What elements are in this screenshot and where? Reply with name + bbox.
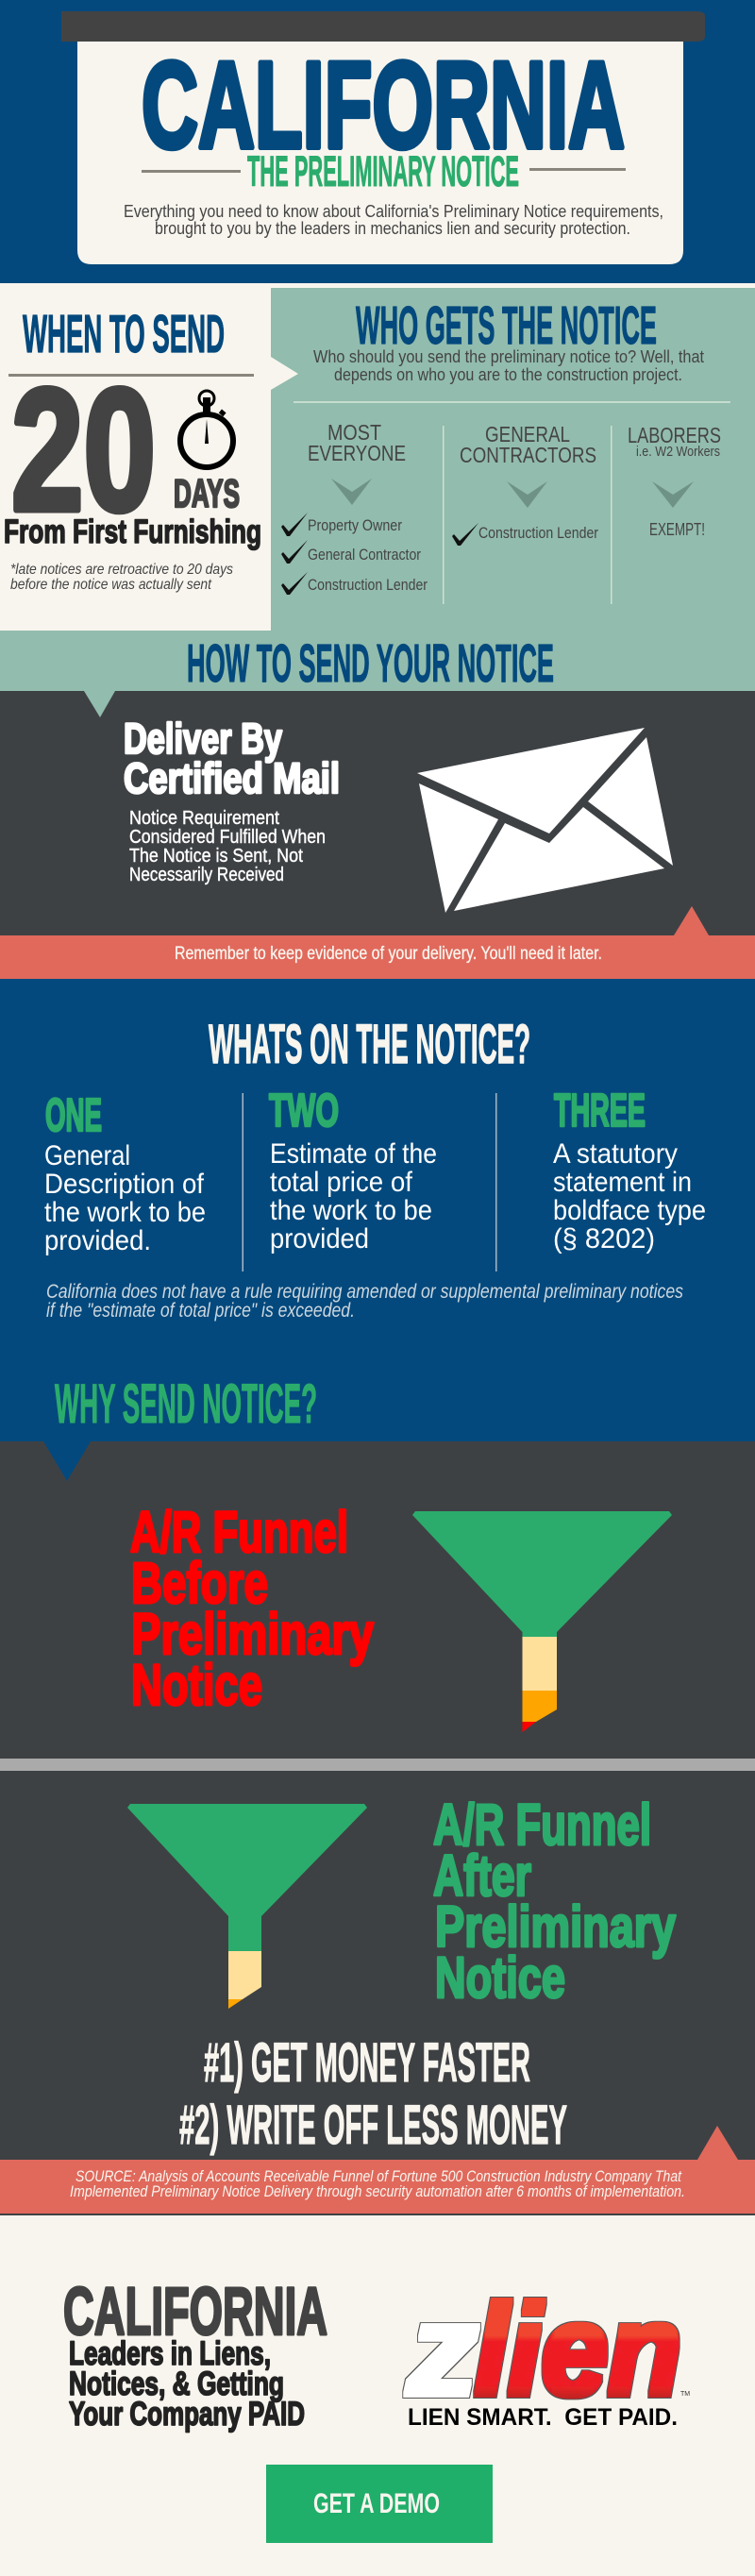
column: one: the work to be xyxy=(44,1197,206,1228)
panel: whats on the notice: WHY SEND NOTICE? xyxy=(55,1373,317,1435)
column: two xyxy=(269,1086,437,1254)
column: three: statement in xyxy=(553,1167,692,1198)
who gets intro text xyxy=(313,347,704,384)
delivery text: Notice Requirement xyxy=(129,808,279,829)
panel: who gets the notice xyxy=(0,288,755,691)
column: general contractors xyxy=(452,422,598,546)
column: most everyone: EVERYONE xyxy=(308,441,406,465)
footer tagline xyxy=(69,2335,305,2433)
column: one: provided. xyxy=(44,1225,151,1256)
delivery text xyxy=(129,808,326,885)
button: get a demo xyxy=(266,2465,493,2543)
column: two: total price of xyxy=(270,1167,413,1198)
logo: zlien: LIEN SMART. GET PAID. xyxy=(408,2404,678,2431)
column: general contractors: CONTRACTORS xyxy=(460,443,596,467)
label: funnel after: After xyxy=(433,1844,531,1908)
intro text: brought to you by the leaders in mechanics lien and security protection. xyxy=(155,219,630,238)
label: funnel before: Notice xyxy=(131,1653,262,1717)
column: two: TWO xyxy=(269,1086,339,1136)
banner: source xyxy=(0,2126,755,2215)
column: three: A statutory xyxy=(553,1138,678,1170)
column: most everyone xyxy=(281,420,428,595)
column: laborers xyxy=(628,423,721,539)
column: laborers: LABORERS xyxy=(628,423,721,447)
banner: keep evidence xyxy=(0,906,755,979)
column: one: Description of xyxy=(44,1169,205,1200)
column: two: Estimate of the xyxy=(270,1138,437,1170)
panel: header xyxy=(0,0,755,283)
label: days: DAYS xyxy=(174,471,240,515)
banner: keep evidence: Remember to keep evidence of your delivery. You'll need it later. xyxy=(175,944,602,964)
button: get a demo: GET A DEMO xyxy=(313,2488,440,2519)
note: estimate of total price: if the "estimate of total price" is exceeded. xyxy=(46,1300,355,1322)
footnote: late notices: *late notices are retroactive to 20 days xyxy=(10,562,233,578)
panel: when to send xyxy=(0,288,298,631)
column: one: ONE xyxy=(45,1090,102,1141)
icon: stopwatch xyxy=(180,391,233,467)
label: funnel after: Preliminary xyxy=(435,1894,676,1959)
check marks xyxy=(281,513,308,595)
chevron xyxy=(507,481,547,508)
column: one: General xyxy=(44,1140,130,1171)
icon: envelope xyxy=(417,728,673,913)
intro text: Everything you need to know about California's Preliminary Notice requirements, xyxy=(124,202,663,221)
chart: funnel after xyxy=(127,1804,367,2009)
heading: deliver by certified mail xyxy=(124,715,340,802)
panel: why send notice xyxy=(0,1441,755,2160)
column: three: THREE xyxy=(554,1086,646,1136)
footnote: late notices: before the notice was actually sent xyxy=(10,577,211,593)
pointer xyxy=(43,1441,91,1481)
footer tagline: Notices, & Getting xyxy=(69,2366,284,2402)
footer tagline: Your Company PAID xyxy=(69,2396,305,2433)
chevron xyxy=(652,481,694,508)
label: funnel before xyxy=(130,1500,374,1717)
column: two: provided xyxy=(270,1223,369,1254)
column: three: boldface type xyxy=(553,1195,706,1226)
column: most everyone: General Contractor xyxy=(308,546,421,564)
column: most everyone: Construction Lender xyxy=(308,576,428,594)
panel: footer xyxy=(63,2275,690,2543)
number: 20: 20 xyxy=(11,352,156,547)
column: most everyone: MOST xyxy=(327,420,381,445)
column: general contractors: Construction Lender xyxy=(478,524,598,542)
pointer xyxy=(84,691,115,717)
delivery text: Considered Fulfilled When xyxy=(129,827,326,848)
chart: funnel before xyxy=(412,1511,672,1732)
label: funnel after xyxy=(433,1793,676,2010)
footnote: late notices xyxy=(10,562,233,593)
column: three: (§ 8202) xyxy=(553,1223,655,1254)
panel: whats on the notice xyxy=(0,979,755,1441)
heading: deliver by certified mail: Deliver By xyxy=(124,715,282,763)
column: laborers: i.e. W2 Workers xyxy=(636,444,720,460)
heading: deliver by certified mail: Certified Mail xyxy=(124,754,340,802)
label: funnel before: Before xyxy=(131,1551,268,1615)
column: one xyxy=(44,1090,206,1256)
header card xyxy=(77,42,683,264)
who gets intro text: Who should you send the preliminary notice to? Well, that xyxy=(313,347,704,366)
column: general contractors: GENERAL xyxy=(485,422,570,446)
note: estimate of total price xyxy=(46,1281,683,1322)
column: laborers: EXEMPT! xyxy=(649,520,705,539)
who gets intro text: depends on who you are to the construction project. xyxy=(334,365,682,384)
header clip bar xyxy=(61,11,705,42)
panel: when to send: WHEN TO SEND xyxy=(23,304,225,364)
footer title: CALIFORNIA xyxy=(63,2275,327,2349)
delivery text: The Notice is Sent, Not xyxy=(129,846,303,867)
label: funnel after: A/R Funnel xyxy=(433,1793,651,1857)
column: most everyone: Property Owner xyxy=(308,516,402,534)
logo: zlien: TM xyxy=(680,2391,690,2398)
panel: how to send xyxy=(0,691,755,935)
logo: zlien: lien xyxy=(475,2278,681,2423)
footer tagline: Leaders in Liens, xyxy=(69,2335,271,2372)
logo: zlien: z xyxy=(406,2278,478,2423)
column: three xyxy=(553,1086,706,1254)
chevron xyxy=(331,479,372,505)
label: from first furnishing: From First Furnishing xyxy=(4,514,261,550)
column: two: the work to be xyxy=(270,1195,432,1226)
label: funnel after: Notice xyxy=(435,1945,565,2010)
label: funnel before: A/R Funnel xyxy=(130,1500,348,1564)
check mark xyxy=(452,523,478,546)
intro text xyxy=(124,202,663,238)
logo: zlien xyxy=(406,2278,690,2431)
label: funnel before: Preliminary xyxy=(131,1602,374,1666)
delivery text: Necessarily Received xyxy=(129,865,284,885)
